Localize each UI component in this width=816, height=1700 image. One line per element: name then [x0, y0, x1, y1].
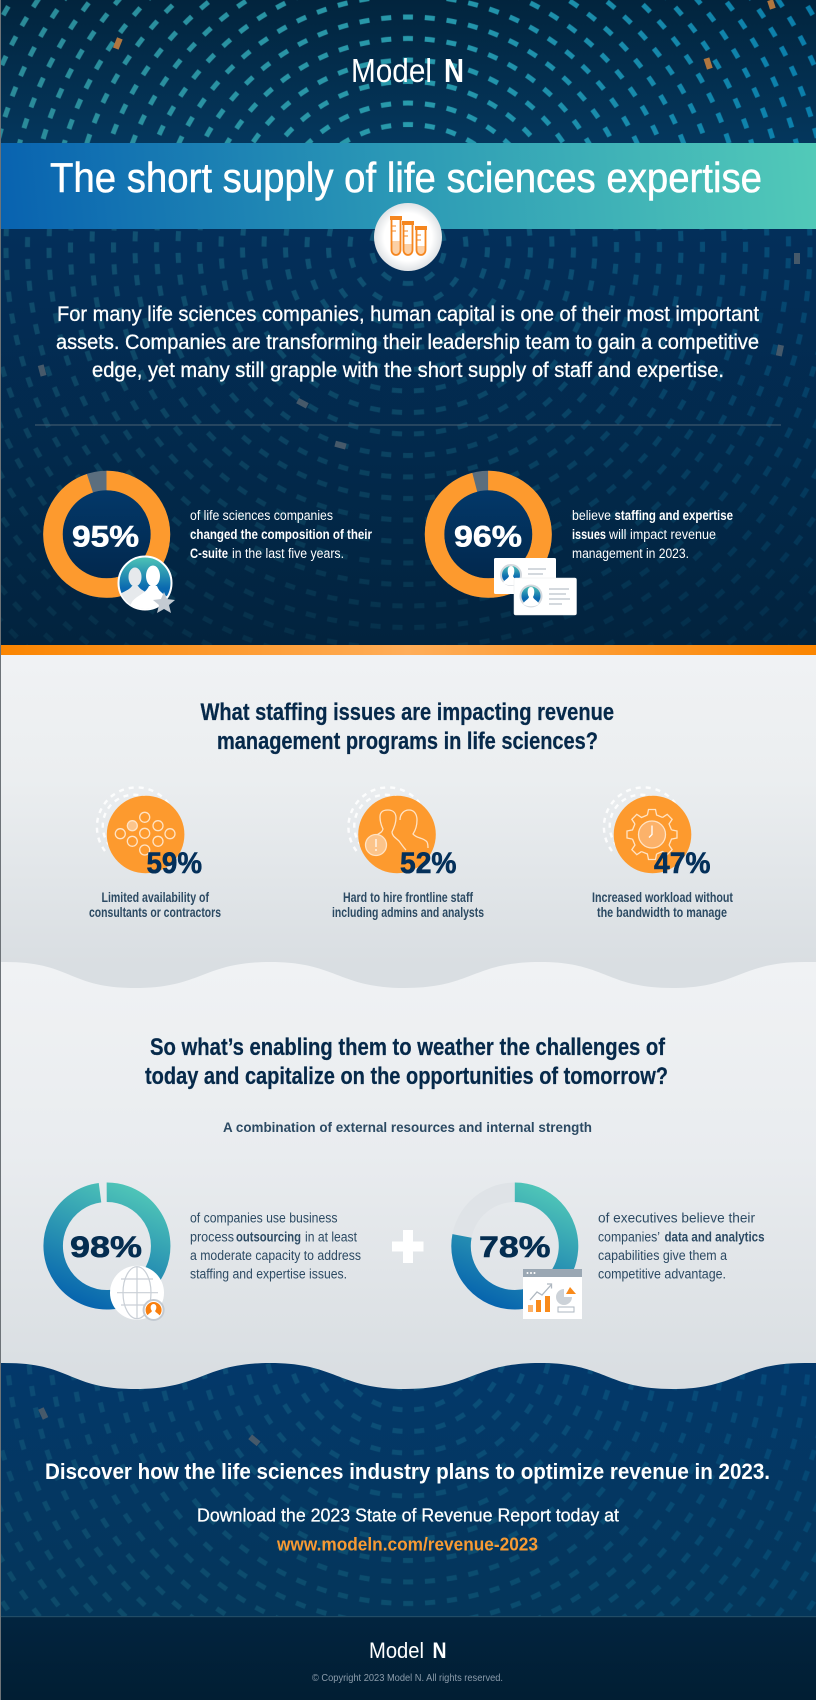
heading: call to action: Discover how the life sciences industry plans to optimize revenue in 2023.	[45, 1459, 770, 1484]
heading: enablers	[145, 1034, 668, 1090]
panel: call to action	[0, 1363, 816, 1617]
text: download line: Download the 2023 State of Revenue Report today at	[197, 1504, 619, 1526]
label: Limited availability of	[102, 890, 209, 905]
panel: staffing issues	[0, 655, 816, 990]
text: 78% description: data and analytics	[664, 1230, 764, 1244]
panel: header background	[0, 0, 816, 143]
copyright: © Copyright 2023 Model N. All rights reserved.	[312, 1672, 503, 1684]
intro text: For many life sciences companies, human capital is one of their most important	[57, 303, 759, 326]
text: 96% description: management in 2023.	[572, 546, 689, 561]
text: 78% description: competitive advantage.	[598, 1267, 726, 1282]
icon: executives	[115, 556, 175, 613]
text: 98% description: process	[190, 1230, 234, 1244]
heading: enablers: today and capitalize on the opportunities of tomorrow?	[145, 1063, 668, 1090]
subheading: A combination of external resources and internal strength	[223, 1120, 592, 1135]
label	[332, 890, 484, 920]
stat: 78% donut	[461, 1192, 582, 1319]
label: consultants or contractors	[89, 905, 221, 920]
icon: test tubes	[374, 203, 442, 271]
text: 98% description	[190, 1210, 361, 1282]
label: including admins and analysts	[332, 905, 484, 920]
title band	[0, 143, 816, 229]
panel: intro section background	[0, 229, 816, 645]
logo: footer Model N: Model	[369, 1638, 424, 1663]
text: 95% description: C-suite	[190, 546, 228, 561]
logo: Model N: N	[444, 52, 464, 89]
heading: staffing issues: management programs in life sciences?	[217, 728, 598, 755]
text: 95% description: of life sciences companies	[190, 508, 333, 523]
number: 95%: 95%	[72, 520, 139, 554]
stat: 47% workload	[592, 787, 733, 920]
text: 95% description	[190, 508, 373, 561]
logo: Model N: Model	[351, 52, 432, 89]
heading: staffing issues: What staffing issues are impacting revenue	[200, 699, 614, 726]
text: 96% description	[572, 508, 733, 561]
stat: 95% donut	[53, 481, 175, 613]
text: 96% description: believe	[572, 508, 611, 523]
number: 47%: 47%	[654, 847, 710, 880]
text: 96% description: staffing and expertise	[614, 508, 733, 523]
text: 98% description: a moderate capacity to address	[190, 1248, 361, 1263]
heading: staffing issues	[200, 699, 614, 755]
icon: profile cards	[494, 558, 576, 615]
text: 95% description: in the last five years.	[232, 546, 344, 561]
number: 98%: 98%	[70, 1231, 142, 1264]
text: 98% description: of companies use business	[190, 1210, 338, 1226]
stat: 59% consultants	[89, 787, 221, 920]
icon: plus	[392, 1230, 424, 1263]
link: report URL: www.modeln.com/revenue-2023	[276, 1534, 538, 1554]
logo: footer Model N: N	[432, 1638, 446, 1663]
number: 78%: 78%	[479, 1231, 550, 1264]
icon: globe with person	[110, 1266, 164, 1320]
intro text	[56, 303, 759, 382]
intro text: edge, yet many still grapple with the short supply of staff and expertise.	[92, 359, 724, 382]
text: 78% description: capabilities give them a	[598, 1248, 727, 1263]
panel: footer	[0, 1616, 816, 1700]
text: 95% description: changed the composition of their	[190, 527, 373, 542]
label: Increased workload without	[592, 890, 733, 905]
number: 52%: 52%	[400, 847, 456, 880]
icon: analytics dashboard	[523, 1269, 582, 1319]
stat: 98% donut	[53, 1192, 164, 1320]
label: the bandwidth to manage	[597, 905, 727, 920]
stat: 52% frontline staff	[332, 787, 484, 920]
text: 78% description: companies’	[598, 1230, 660, 1244]
panel: enablers	[0, 962, 816, 1392]
title: The short supply of life sciences expertise	[50, 154, 762, 201]
text: 96% description: will impact revenue	[608, 527, 716, 542]
text: 98% description: outsourcing	[236, 1230, 301, 1244]
heading: enablers: So what’s enabling them to weather the challenges of	[150, 1034, 666, 1061]
stat: 96% donut	[435, 481, 576, 615]
text: 98% description: staffing and expertise issues.	[190, 1267, 347, 1282]
label	[592, 890, 733, 920]
number: 96%: 96%	[454, 520, 522, 554]
text: 96% description: issues	[572, 527, 606, 542]
text: 78% description: of executives believe their	[598, 1210, 756, 1226]
intro text: assets. Companies are transforming their leadership team to gain a competitive	[56, 331, 759, 354]
label	[89, 890, 221, 920]
number: 59%: 59%	[146, 847, 202, 880]
text: 98% description: in at least	[305, 1230, 357, 1244]
text: 78% description	[598, 1210, 764, 1282]
label: Hard to hire frontline staff	[343, 890, 473, 905]
